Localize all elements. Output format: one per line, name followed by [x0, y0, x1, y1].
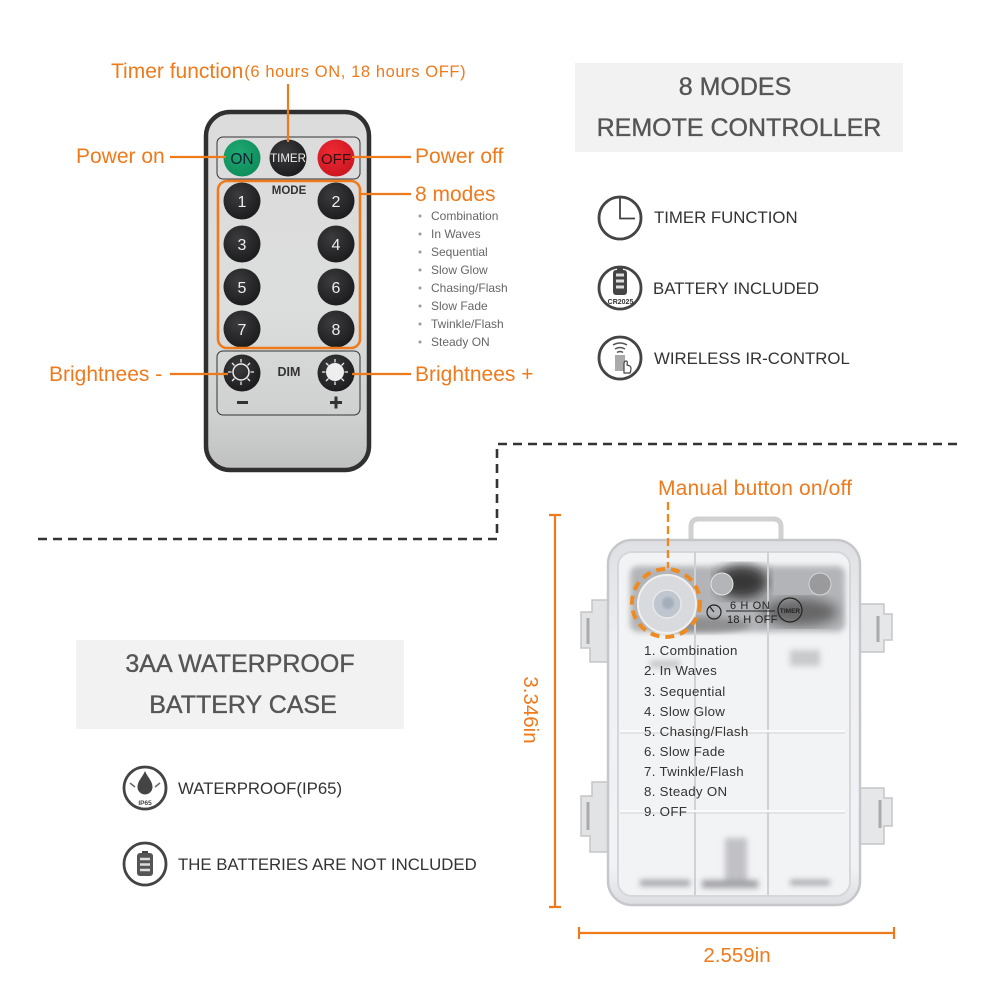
case grid ridges — [695, 552, 768, 895]
feature: batteries not included — [124, 843, 477, 885]
mode buttons: 3 — [238, 237, 247, 254]
case mode list: 4. Slow Glow — [644, 704, 725, 719]
button: timer — [270, 140, 306, 176]
mode list: Combination — [431, 209, 498, 223]
battery case — [581, 519, 892, 905]
heading panel: battery case — [76, 640, 404, 729]
dimension: height: 3.346in — [519, 676, 542, 744]
case mode list: 7. Twinkle/Flash — [644, 764, 744, 779]
timer marking: 6 H ON — [730, 600, 770, 612]
right clips — [860, 604, 892, 844]
mode buttons: 2 — [332, 194, 341, 211]
feature: waterproof: WATERPROOF(IP65) — [178, 779, 342, 798]
callout: brightness minus: Brightnees - — [49, 363, 162, 386]
feature: timer function — [599, 197, 798, 239]
feature: battery included — [599, 267, 819, 309]
case handle — [691, 519, 781, 545]
remote body — [206, 112, 369, 470]
callout: 8 modes: 8 modes — [415, 183, 496, 206]
case mode list: 2. In Waves — [644, 663, 717, 678]
remote control — [206, 112, 369, 470]
mode list: Slow Glow — [431, 263, 488, 277]
case mode list: 9. OFF — [644, 804, 687, 819]
button: off: OFF — [321, 151, 351, 168]
icon: battery — [124, 843, 166, 885]
dim panel — [217, 351, 360, 415]
mode buttons: MODE — [272, 185, 307, 197]
mode list: Slow Fade — [431, 299, 488, 313]
dimension: width: 2.559in — [703, 944, 771, 967]
mode buttons: 7 — [238, 322, 247, 339]
mode buttons: 6 — [332, 280, 341, 297]
heading panel: remote controller: 8 MODES — [679, 73, 791, 101]
dark circuit area — [630, 565, 845, 633]
icon: water drop — [124, 767, 166, 809]
heading panel: battery case: BATTERY CASE — [149, 691, 337, 719]
case mode list: 3. Sequential — [644, 684, 726, 699]
mode buttons: 1 — [238, 194, 247, 211]
callout: timer function: (6 hours ON, 18 hours OFF) — [244, 63, 466, 81]
timer marking: TIMER — [780, 608, 800, 615]
icon: battery: CR2025 — [608, 299, 633, 306]
timer marking — [707, 598, 802, 626]
dimension: width — [579, 927, 894, 967]
mode buttons — [224, 182, 354, 348]
top button panel — [217, 137, 360, 179]
plus sign — [330, 396, 342, 408]
mode list: Twinkle/Flash — [431, 317, 504, 331]
case body — [608, 540, 860, 905]
button: on: ON — [230, 151, 254, 168]
mode list: Chasing/Flash — [431, 281, 508, 295]
dim label: DIM — [278, 365, 300, 379]
manual button highlight — [632, 569, 700, 637]
case mode list — [644, 643, 749, 819]
manual button — [638, 575, 696, 633]
callout: brightness plus: Brightnees + — [415, 363, 534, 386]
case mode list: 1. Combination — [644, 643, 738, 658]
feature: waterproof — [124, 767, 342, 809]
mode list: In Waves — [431, 227, 481, 241]
case mode list: 5. Chasing/Flash — [644, 724, 749, 739]
button: brightness down — [224, 354, 260, 392]
button: timer: TIMER — [270, 153, 306, 165]
icon: battery — [599, 267, 641, 309]
button: brightness up — [318, 354, 354, 392]
case mode list: 8. Steady ON — [644, 784, 727, 799]
feature: battery included: BATTERY INCLUDED — [653, 279, 819, 298]
feature: wireless ir-control: WIRELESS IR-CONTROL — [654, 349, 850, 368]
dimension: height — [519, 515, 561, 907]
heading panel: remote controller — [575, 63, 903, 152]
mode list: Steady ON — [431, 335, 490, 349]
case mode list: 6. Slow Fade — [644, 744, 725, 759]
button: on — [224, 140, 260, 176]
mode list — [418, 209, 508, 349]
heading panel: battery case: 3AA WATERPROOF — [125, 650, 355, 678]
feature: wireless ir-control — [599, 337, 850, 379]
callout: timer function: Timer function — [111, 60, 243, 83]
feature: timer function: TIMER FUNCTION — [654, 208, 798, 227]
timer marking: 18 H OFF — [727, 614, 778, 626]
mode list: Sequential — [431, 245, 488, 259]
callout: manual button: Manual button on/off — [658, 477, 852, 500]
icon: clock — [599, 197, 641, 239]
icon: water drop: IP65 — [138, 800, 152, 807]
case bottom shadows and springs — [640, 650, 830, 888]
mode highlight — [218, 181, 360, 348]
minus sign — [237, 401, 248, 404]
callout: 8 modes — [361, 183, 496, 206]
left clips — [581, 600, 608, 852]
button: off — [318, 140, 354, 176]
callout: power on: Power on — [76, 145, 165, 168]
heading panel: remote controller: REMOTE CONTROLLER — [597, 114, 881, 142]
callout: power off: Power off — [415, 145, 503, 168]
callout: timer function — [111, 60, 466, 142]
feature: batteries not included: THE BATTERIES ARE NOT INCLUDED — [178, 855, 477, 874]
mode buttons: 5 — [238, 280, 247, 297]
mode buttons: 8 — [332, 322, 341, 339]
dashed divider — [38, 444, 957, 539]
mode buttons: 4 — [332, 237, 341, 254]
icon: remote with hand — [599, 337, 641, 379]
